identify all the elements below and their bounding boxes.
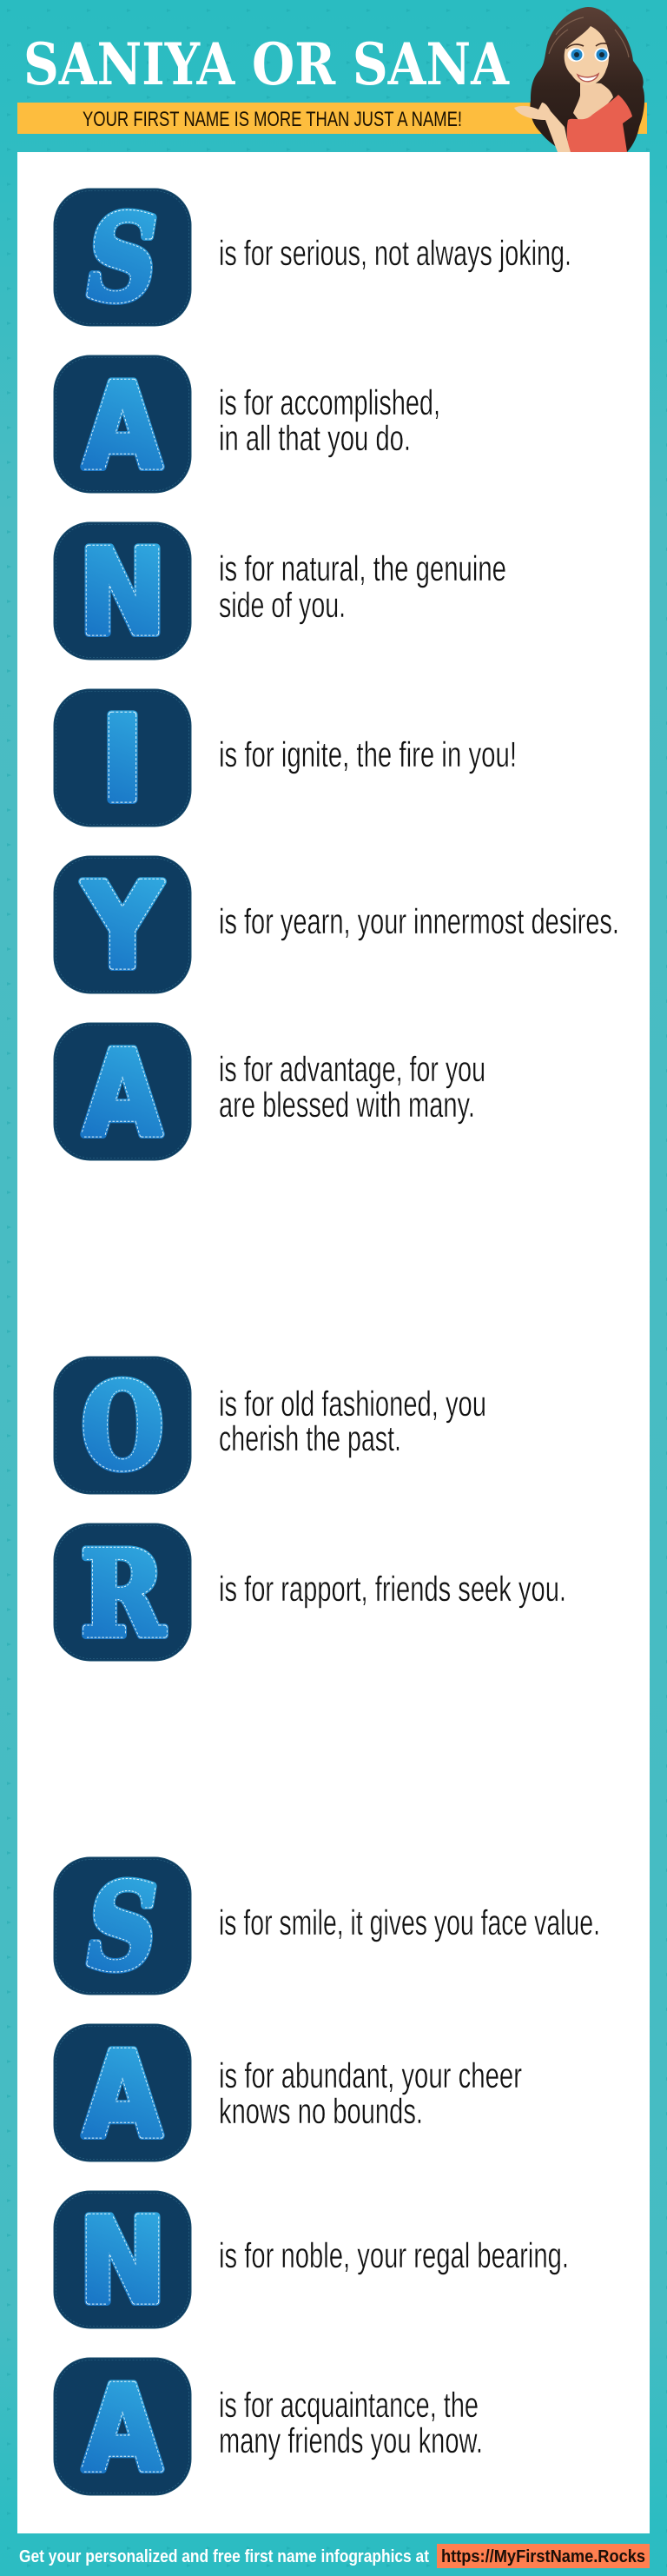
tile: letter S: S: [88, 189, 157, 327]
tile: letter S: [54, 189, 191, 327]
tile: letter A: A: [83, 2361, 162, 2497]
tile: letter Y: [54, 856, 191, 994]
row: A - abundant: [54, 2024, 522, 2163]
text: abundant: [219, 2055, 522, 2131]
text: old fashioned: cherish the past.: [219, 1418, 401, 1458]
text: advantage: [219, 1049, 485, 1125]
text: natural: is for natural, the genuine: [219, 548, 506, 588]
tile: letter A: [54, 1023, 191, 1162]
text: acquaintance: is for acquaintance, the: [219, 2385, 479, 2425]
tile: letter A: A: [83, 1026, 162, 1162]
tile: letter S: S: [88, 1858, 157, 1995]
tile: letter A: [54, 2358, 191, 2497]
tile: letter A: A: [83, 359, 162, 495]
tile: letter N: [54, 2191, 191, 2329]
tile: letter R: R: [81, 1525, 165, 1663]
tile: letter S: S: [88, 1858, 157, 1995]
tile: letter A: A: [83, 2361, 162, 2497]
text: acquaintance: [219, 2385, 483, 2460]
subtitle banner: [17, 103, 647, 134]
tile: letter A: A: [83, 1026, 162, 1162]
row: A - advantage: [54, 1023, 485, 1162]
text: accomplished: [219, 382, 440, 458]
tile: letter N: N: [79, 525, 166, 661]
tile: letter A: A: [83, 359, 162, 495]
row: R - rapport: [54, 1524, 566, 1663]
tile: letter R: R: [81, 1525, 165, 1663]
tile: letter I: I: [101, 692, 144, 827]
tile: letter I: I: [101, 692, 144, 827]
title: SANIYA OR SANA: [23, 30, 510, 98]
tile: letter N: N: [79, 2194, 166, 2329]
tile: letter R: R: [81, 1525, 165, 1663]
tile: letter Y: Y: [82, 859, 163, 994]
text: acquaintance: many friends you know.: [219, 2420, 483, 2460]
text: old fashioned: [219, 1384, 486, 1458]
tile: letter O: O: [82, 1358, 163, 1495]
tile: letter A: [54, 2024, 191, 2163]
tile: letter N: N: [79, 2194, 166, 2329]
tile: letter A: A: [83, 359, 162, 495]
text: natural: [219, 548, 506, 625]
tile: letter S: [54, 1857, 191, 1995]
row: S - smile: [54, 1857, 600, 1995]
tile: letter I: I: [101, 692, 144, 827]
tile: letter A: A: [83, 2028, 162, 2163]
tile: letter R: [54, 1524, 191, 1663]
row: N - noble: [54, 2191, 569, 2329]
row: S - serious: [54, 189, 571, 327]
text: accomplished: in all that you do.: [219, 418, 411, 458]
tile: letter N: N: [79, 525, 166, 661]
text: old fashioned: is for old fashioned, you: [219, 1384, 486, 1424]
tile: letter A: A: [83, 1026, 162, 1162]
tile: letter A: [54, 355, 191, 495]
row: Y - yearn: [54, 856, 619, 994]
tile: letter O: O: [82, 1358, 163, 1495]
text: natural: side of you.: [219, 585, 346, 625]
tile: letter S: S: [88, 1858, 157, 1995]
tile: letter N: N: [79, 2194, 166, 2329]
text: ignite: is for ignite, the fire in you!: [219, 734, 517, 774]
text: accomplished: is for accomplished,: [219, 382, 440, 422]
row: A - accomplished: [54, 355, 440, 495]
text: advantage: are blessed with many.: [219, 1085, 475, 1125]
text: abundant: knows no bounds.: [219, 2091, 423, 2131]
footer call to action: Get your personalized and free first name infographics at: [19, 2547, 429, 2566]
tile: letter O: O: [82, 1358, 163, 1495]
row: I - ignite: [54, 689, 517, 827]
text: abundant: is for abundant, your cheer: [219, 2055, 522, 2095]
row: N - natural: [54, 522, 506, 661]
row: A - acquaintance: [54, 2358, 483, 2497]
text: advantage: is for advantage, for you: [219, 1049, 485, 1089]
tile: letter A: A: [83, 2028, 162, 2163]
tile: letter A: A: [83, 2361, 162, 2497]
tile: letter Y: Y: [82, 859, 163, 994]
subtitle banner: YOUR FIRST NAME IS MORE THAN JUST A NAME!: [83, 108, 462, 131]
tile: letter N: [54, 522, 191, 661]
tile: letter N: N: [79, 525, 166, 661]
tile: letter A: A: [83, 2028, 162, 2163]
tile: letter I: [54, 689, 191, 827]
illustration: woman presenting: [514, 7, 644, 152]
row: O - old fashioned: [54, 1357, 486, 1495]
tile: letter S: S: [88, 189, 157, 327]
footer url badge: https://MyFirstName.Rocks: [441, 2547, 645, 2566]
tile: letter Y: Y: [82, 859, 163, 994]
tile: letter S: S: [88, 189, 157, 327]
